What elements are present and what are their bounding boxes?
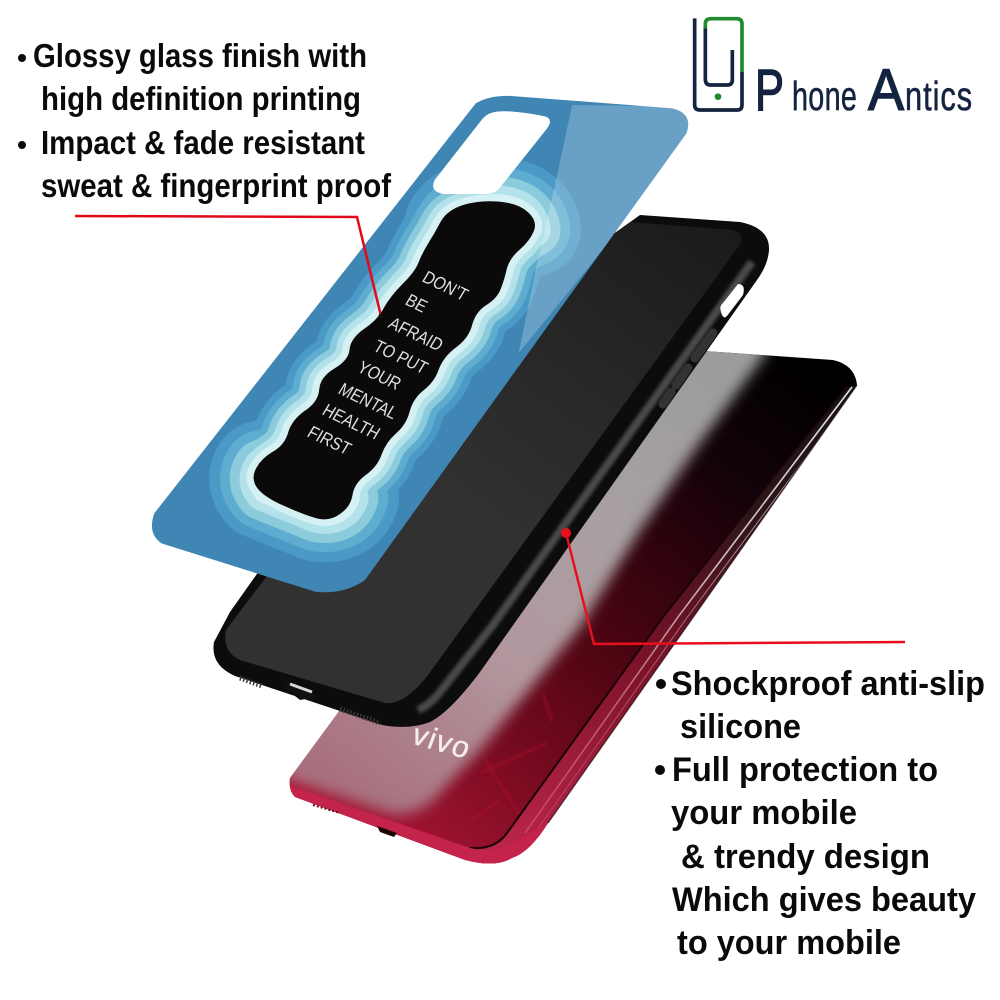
black wavy shape [254, 201, 535, 519]
logo wordmark: hone [792, 74, 857, 119]
quote on panel: BE [402, 290, 431, 317]
black silicone case [213, 215, 769, 727]
speaker holes on rear phone [313, 805, 340, 813]
logo wordmark: A [868, 58, 904, 123]
case side strip [418, 262, 752, 710]
callout line: glass finish [75, 216, 384, 318]
quote on panel: DON'T [419, 267, 472, 305]
quote on panel: FIRST [304, 422, 355, 459]
callout line: silicone [561, 528, 905, 644]
logo icon [695, 18, 742, 110]
text block: case features: & trendy design [681, 838, 930, 876]
bottom port on rear phone [377, 826, 397, 837]
logo wordmark: ntics [905, 73, 973, 119]
rear phone in red and black gradient [290, 351, 858, 864]
glass reflection [519, 105, 697, 353]
quote on panel: MENTAL [335, 379, 401, 423]
quote on panel: TO PUT [370, 336, 432, 378]
text block: glass features: sweat & fingerprint proof [41, 167, 392, 204]
text block: case features: Full protection to [672, 751, 938, 789]
text block: case features: your mobile [671, 794, 857, 832]
text block: case features: Which gives beauty [672, 881, 976, 919]
quote on panel: HEALTH [319, 400, 384, 443]
quote on panel [304, 267, 472, 459]
quote on panel: AFRAID [385, 313, 447, 355]
case side buttons [663, 333, 713, 404]
logo wordmark: P [755, 58, 784, 123]
text block: case features: silicone [680, 708, 801, 746]
case grille [240, 678, 380, 723]
quote on panel: YOUR [354, 357, 405, 394]
text block: glass features: Impact & fade resistant [41, 124, 365, 161]
text block: glass features [18, 37, 392, 204]
text block: case features [655, 665, 985, 962]
camera cutout [433, 111, 550, 194]
text block: glass features: high definition printing [41, 80, 361, 117]
text block: case features: to your mobile [677, 924, 901, 962]
case inner panel [225, 222, 742, 703]
logo: Phone Antics [695, 18, 973, 123]
text block: case features: Shockproof anti-slip [671, 665, 985, 703]
case camera notch [720, 284, 744, 317]
glass back panel [152, 96, 697, 592]
vivo logo: vivo [408, 719, 476, 766]
case charging port [285, 683, 317, 700]
logo wordmark [755, 58, 973, 123]
wave layers [254, 201, 535, 519]
text block: glass features: Glossy glass finish with [33, 37, 367, 74]
